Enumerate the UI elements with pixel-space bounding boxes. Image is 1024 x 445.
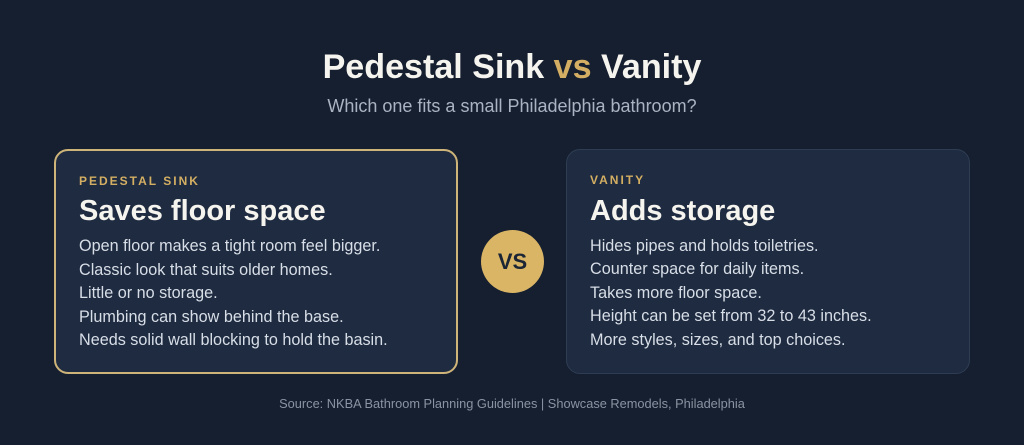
subtitle: Which one fits a small Philadelphia bathroom? bbox=[327, 96, 697, 116]
pedestal label: PEDESTAL SINK bbox=[79, 174, 200, 188]
panel: vanity bbox=[566, 149, 970, 374]
vanity points: Takes more floor space. bbox=[590, 284, 762, 302]
vanity points: Hides pipes and holds toiletries. bbox=[590, 236, 819, 254]
vanity points bbox=[590, 236, 872, 349]
pedestal points bbox=[79, 237, 388, 349]
vanity heading: Adds storage bbox=[590, 194, 775, 226]
pedestal points: Little or no storage. bbox=[79, 284, 218, 302]
pedestal points: Plumbing can show behind the base. bbox=[79, 308, 344, 326]
vs badge bbox=[481, 230, 544, 293]
vanity points: Counter space for daily items. bbox=[590, 260, 804, 278]
vanity label: VANITY bbox=[590, 173, 645, 187]
vanity points: More styles, sizes, and top choices. bbox=[590, 331, 846, 349]
panel: pedestal sink bbox=[54, 149, 458, 374]
title: Pedestal Sink vs Vanity bbox=[323, 48, 701, 86]
pedestal points: Open floor makes a tight room feel bigger. bbox=[79, 237, 380, 255]
pedestal points: Needs solid wall blocking to hold the basin. bbox=[79, 331, 388, 349]
vanity points: Height can be set from 32 to 43 inches. bbox=[590, 307, 872, 325]
pedestal heading: Saves floor space bbox=[79, 195, 326, 227]
vs badge: VS bbox=[498, 249, 527, 274]
source note: Source: NKBA Bathroom Planning Guidelines | Showcase Remodels, Philadelphia bbox=[279, 396, 745, 411]
pedestal points: Classic look that suits older homes. bbox=[79, 261, 333, 279]
